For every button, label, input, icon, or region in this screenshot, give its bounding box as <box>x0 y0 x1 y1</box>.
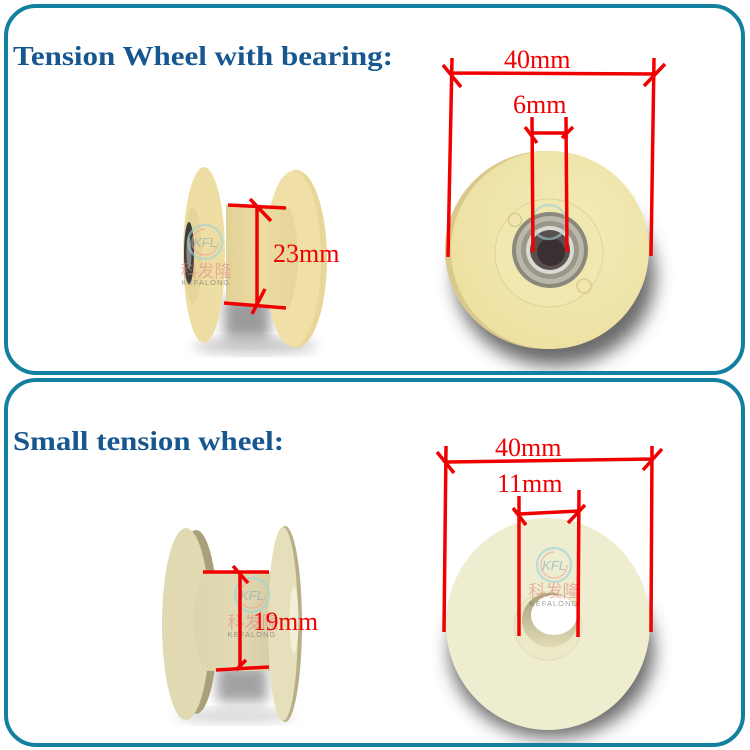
dimension: 40mm bottom: 40mm <box>495 433 561 462</box>
dimension: 40mm top <box>443 45 665 257</box>
photo: bearing wheel front view <box>445 151 655 366</box>
panel: tension wheel with bearing <box>6 6 743 373</box>
watermark: 科发隆 <box>228 613 278 632</box>
dimension: 6mm: 6mm <box>513 90 566 119</box>
watermark <box>180 225 232 287</box>
dimension: 19mm: 19mm <box>253 607 318 636</box>
panel: small tension wheel <box>6 380 743 745</box>
photo: bearing wheel side view <box>180 167 327 353</box>
dimension: 23mm <box>224 199 339 314</box>
watermark <box>532 205 566 239</box>
watermark: 科发隆 <box>180 262 232 281</box>
dimension: 40mm top: 40mm <box>504 45 570 74</box>
dimension: 11mm: 11mm <box>497 469 562 498</box>
dimension: 19mm <box>203 566 318 670</box>
heading: small tension wheel: Small tension wheel: <box>13 426 284 456</box>
dimension: 6mm <box>513 90 573 252</box>
watermark: KFL <box>542 558 566 573</box>
watermark <box>528 548 580 608</box>
watermark: 科发隆 <box>528 582 580 601</box>
dimension: 40mm bottom <box>437 433 662 632</box>
dimension: 11mm <box>497 469 585 637</box>
watermark: KEFALONG <box>182 278 230 287</box>
photo: small wheel side view <box>162 526 302 722</box>
watermark <box>228 578 278 639</box>
watermark: KEFALONG <box>530 599 578 608</box>
heading: tension wheel with bearing: Tension Wheel with bearing: <box>13 40 393 71</box>
photo: small wheel front view <box>446 518 654 738</box>
watermark: KEFALONG <box>228 630 276 639</box>
dimension: 23mm: 23mm <box>273 239 339 268</box>
watermark: KFL <box>193 235 217 250</box>
watermark: KFL <box>240 588 264 603</box>
